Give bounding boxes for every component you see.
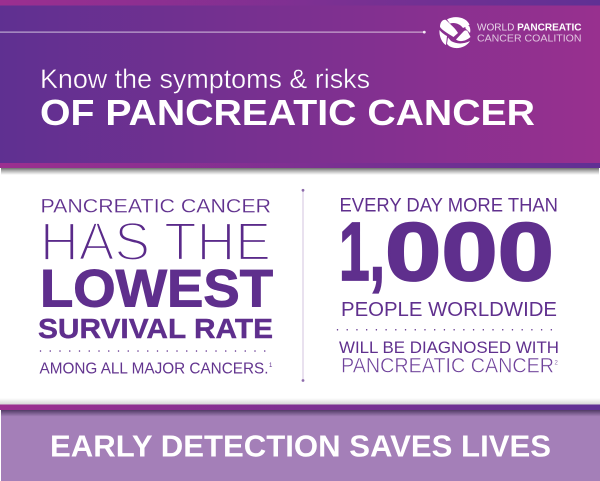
panel: left statistic bbox=[38, 197, 274, 377]
text: has the: HAS THE bbox=[40, 212, 271, 272]
dotted rule bbox=[338, 329, 561, 331]
logo wordmark: CANCER COALITION bbox=[477, 32, 582, 44]
text: among all major cancers: AMONG ALL MAJOR CANCERS. bbox=[40, 360, 268, 377]
panel: header banner bbox=[0, 0, 600, 175]
divider bbox=[302, 189, 304, 382]
logo wordmark: WORLD PANCREATIC bbox=[477, 22, 582, 34]
header title: OF PANCREATIC CANCER bbox=[40, 92, 535, 133]
text: pancreatic cancer: PANCREATIC CANCER bbox=[40, 197, 271, 218]
number: 1,000: 000 bbox=[385, 205, 554, 298]
footer slogan: EARLY DETECTION SAVES LIVES bbox=[50, 429, 551, 464]
text: survival rate: SURVIVAL RATE bbox=[38, 313, 273, 344]
text: people worldwide: PEOPLE WORLDWIDE bbox=[341, 299, 557, 321]
text: every day more than: EVERY DAY MORE THAN bbox=[340, 196, 558, 217]
dotted rule bbox=[40, 350, 274, 352]
header subtitle: Know the symptoms & risks bbox=[40, 64, 370, 94]
panel: right statistic bbox=[338, 196, 561, 377]
text: will be diagnosed with: WILL BE DIAGNOSED WITH bbox=[339, 338, 559, 357]
footnote 2: 2 bbox=[554, 360, 558, 366]
text: pancreatic cancer: PANCREATIC CANCER bbox=[341, 354, 554, 377]
number: 1,000: 1, bbox=[339, 205, 385, 298]
text: lowest: LOWEST bbox=[40, 260, 273, 319]
panel: footer banner bbox=[0, 398, 600, 481]
footnote 1: 1 bbox=[269, 363, 273, 369]
logo wordmark bbox=[477, 22, 582, 44]
hairline with end dot bbox=[0, 31, 426, 34]
icon: coalition logo bbox=[439, 17, 470, 48]
